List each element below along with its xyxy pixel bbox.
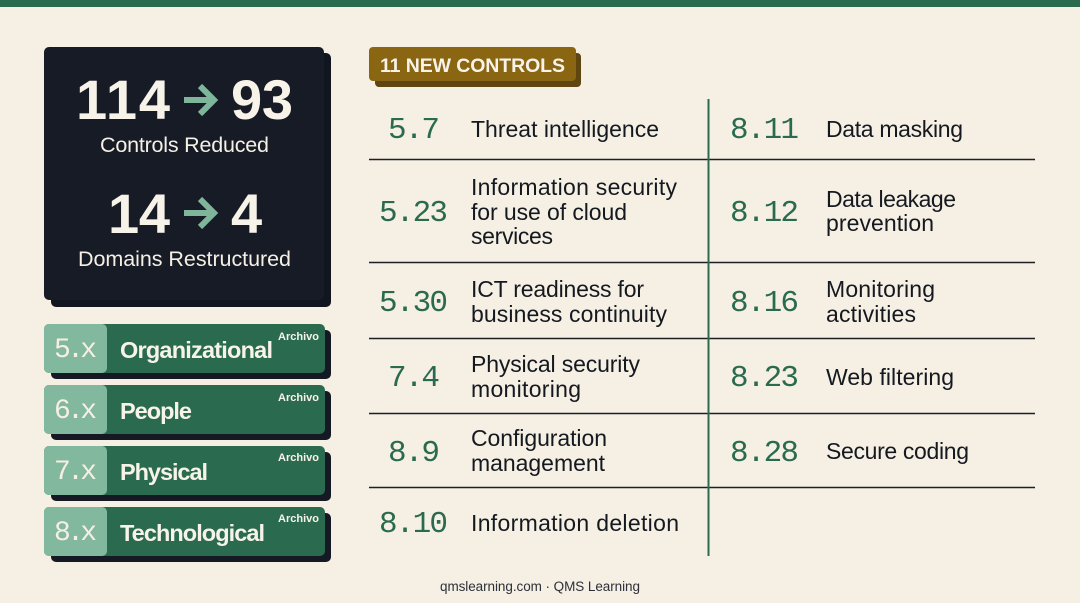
control 8.10: 8.10 (379, 507, 448, 542)
domain bar: technological: Technological (120, 520, 265, 546)
top bar (0, 0, 1080, 7)
table of controls (369, 99, 1035, 556)
domain bar: technological: Archivo (278, 513, 319, 525)
control 5.30: ICT readiness for (471, 276, 644, 302)
stat number: 114: 114 (76, 68, 170, 131)
control 8.10: Information deletion (471, 510, 679, 536)
control 8.16 (730, 276, 935, 327)
control 8.11: Data masking (826, 116, 963, 142)
domain bar: physical (44, 446, 331, 501)
control 5.7: 5.7 (388, 113, 440, 148)
domain bar: people: 6.x (54, 396, 97, 427)
control 8.16: Monitoring (826, 276, 935, 302)
control 8.16: activities (826, 301, 916, 327)
control 5.23 (379, 174, 678, 249)
icon: arrow 1 (184, 86, 214, 114)
control 8.28: Secure coding (826, 438, 969, 464)
panel: stats (44, 47, 331, 307)
control 7.4: 7.4 (388, 361, 440, 396)
control 8.9: Configuration (471, 425, 607, 451)
control 8.9: 8.9 (388, 436, 440, 471)
stat number: 93: 93 (231, 68, 293, 131)
control 5.30: business continuity (471, 301, 668, 327)
control 8.23: 8.23 (730, 361, 799, 396)
control 8.28: 8.28 (730, 436, 799, 471)
control 5.23: for use of cloud (471, 199, 627, 225)
domain bar: people (44, 385, 331, 440)
stat number: 4: 4 (231, 182, 262, 245)
control 8.11: 8.11 (730, 113, 799, 148)
control 8.11 (730, 113, 963, 148)
domain bar: organizational: Organizational (120, 337, 273, 363)
control 8.12: prevention (826, 210, 934, 236)
control 8.23 (730, 361, 954, 396)
domain bar: physical: 7.x (54, 457, 97, 488)
control 8.12 (730, 186, 956, 236)
control 8.12: 8.12 (730, 196, 799, 231)
control 5.30 (379, 276, 668, 327)
control 8.28 (730, 436, 969, 471)
control 8.16: 8.16 (730, 286, 799, 321)
control 8.23: Web filtering (826, 364, 954, 390)
control 8.10 (379, 507, 679, 542)
control 5.30: 5.30 (379, 286, 448, 321)
control 8.9 (388, 425, 607, 476)
label: controls reduced: Controls Reduced (100, 133, 269, 157)
domain bar: organizational (44, 324, 331, 379)
control 8.9: management (471, 450, 606, 476)
control 5.23: 5.23 (379, 196, 448, 231)
badge: 11 new controls: 11 NEW CONTROLS (380, 55, 565, 77)
icon: arrow 2 (184, 199, 214, 227)
domain bar: technological (44, 507, 331, 562)
domain bar: technological: 8.x (54, 518, 97, 549)
domain bar: organizational: 5.x (54, 335, 97, 366)
control 5.23: services (471, 223, 553, 249)
stat number: 14: 14 (108, 182, 170, 245)
control 7.4: Physical security (471, 351, 640, 377)
control 7.4 (388, 351, 640, 402)
control 5.23: Information security (471, 174, 678, 200)
control 5.7: Threat intelligence (471, 116, 659, 142)
badge: 11 new controls (369, 47, 581, 87)
control 5.7 (388, 113, 659, 148)
domain bar: people: People (120, 398, 192, 424)
domain bar: physical: Physical (120, 459, 208, 485)
control 7.4: monitoring (471, 376, 581, 402)
control 8.12: Data leakage (826, 186, 956, 212)
domain bar: people: Archivo (278, 392, 319, 404)
domain bar: physical: Archivo (278, 452, 319, 464)
label: domains restructured: Domains Restructured (78, 247, 291, 271)
domain bar: organizational: Archivo (278, 331, 319, 343)
footer credit: qmslearning.com · QMS Learning (440, 579, 640, 594)
